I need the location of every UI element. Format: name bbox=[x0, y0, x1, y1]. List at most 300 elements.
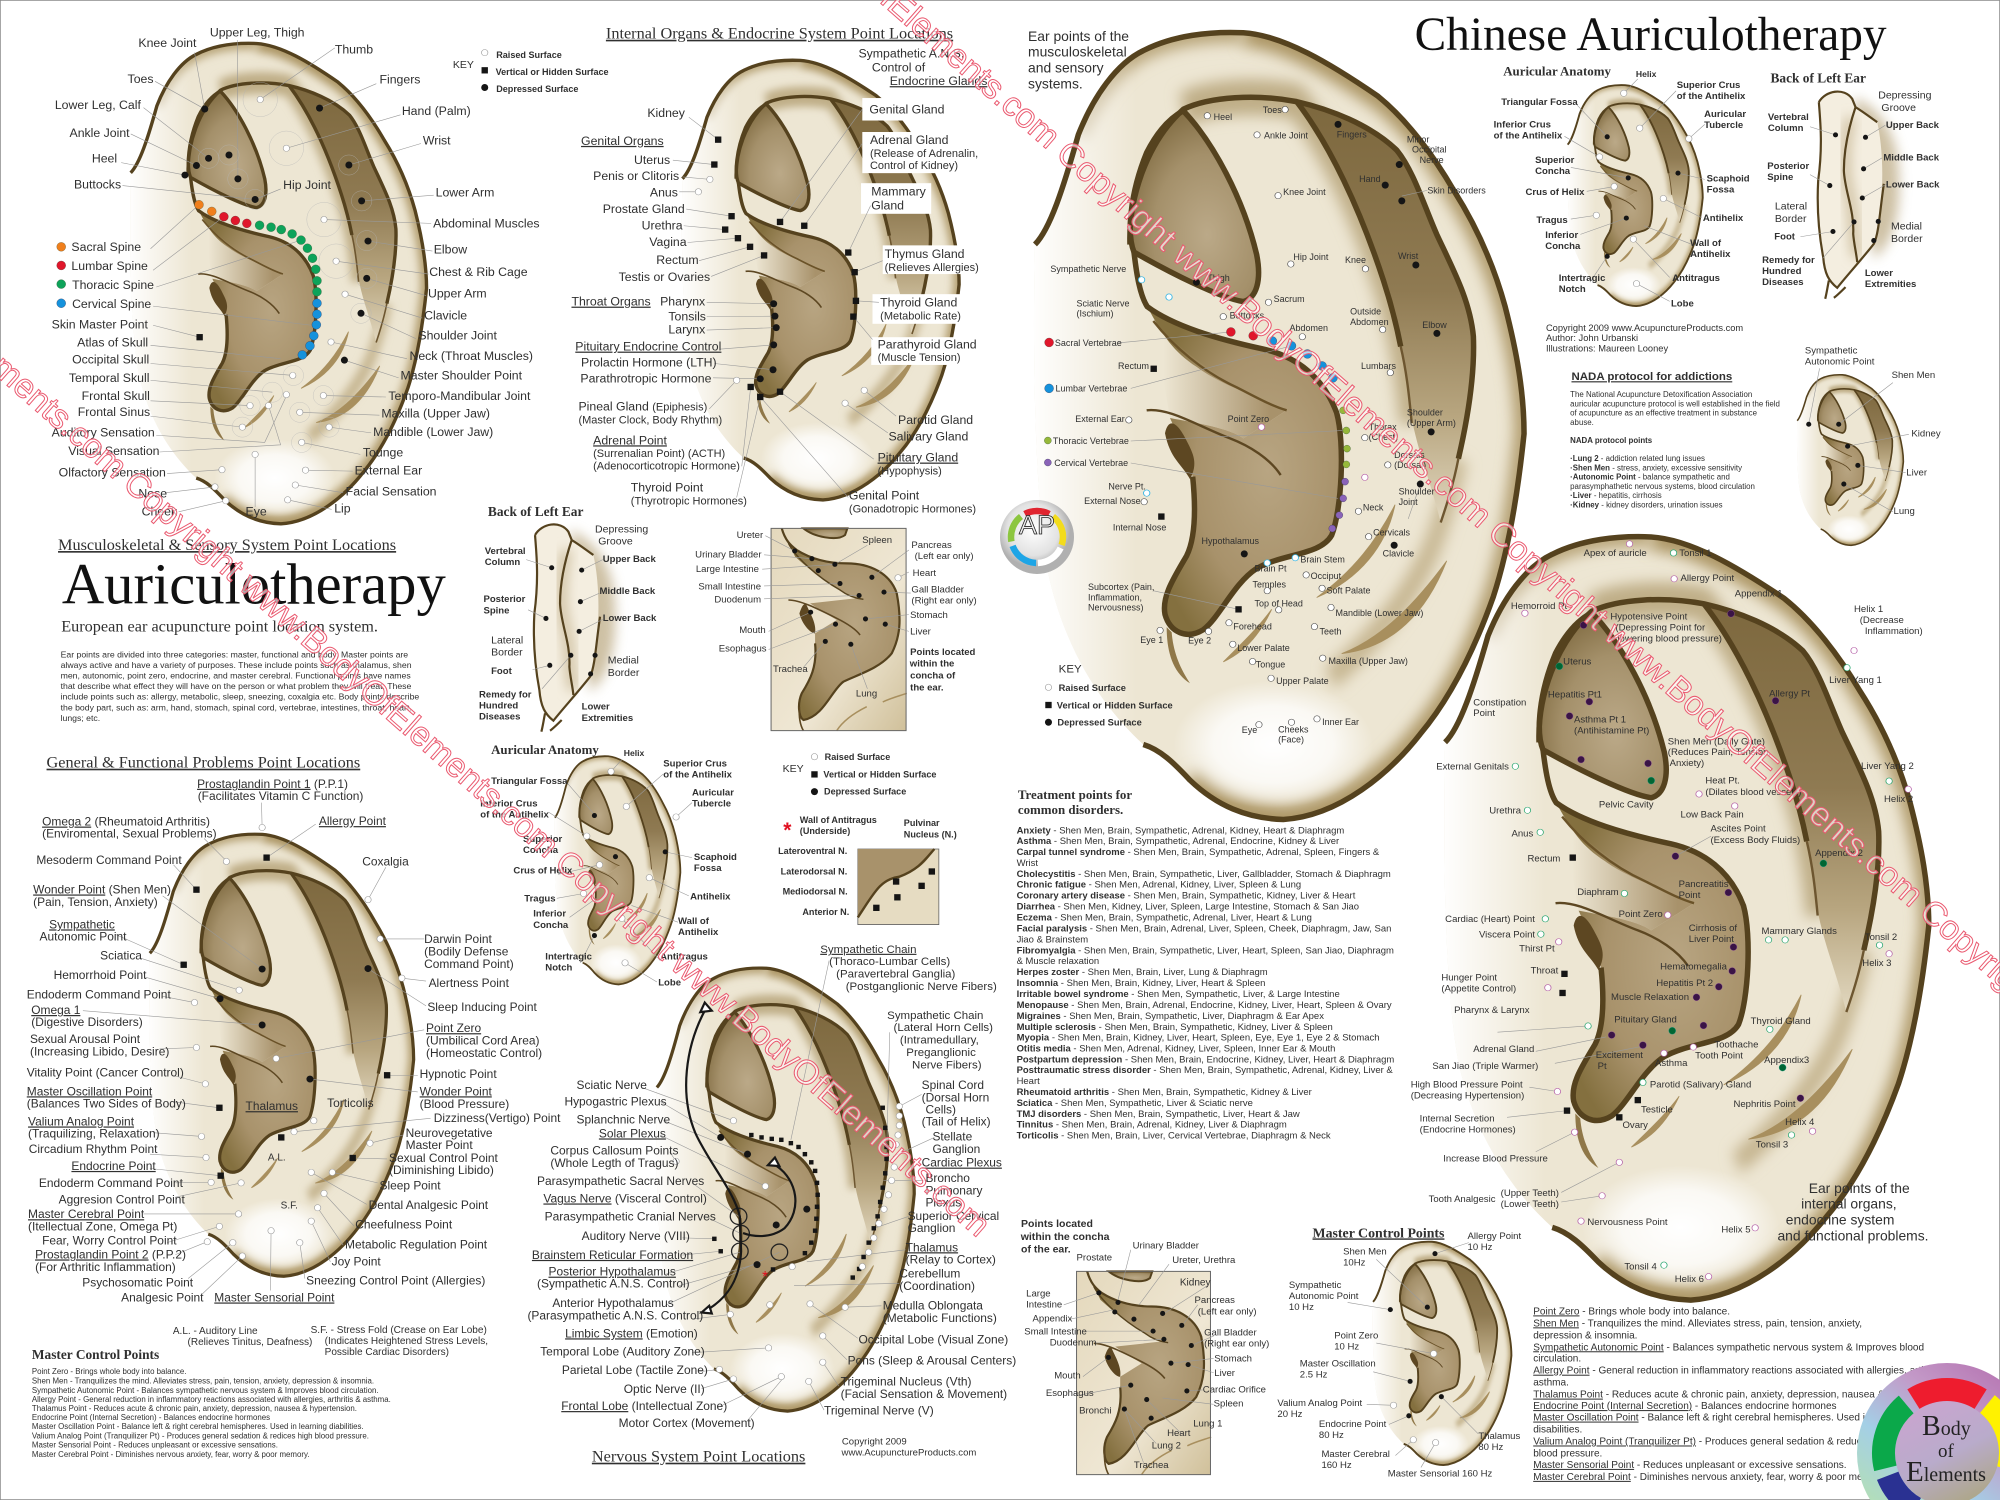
caption bbox=[1777, 1180, 1929, 1243]
labels: Endoderm Command Point bbox=[39, 1176, 184, 1190]
labels: Heart bbox=[913, 568, 936, 579]
labels: Sciatic Nerve bbox=[577, 1078, 647, 1092]
labels: (Increasing Libido, Desire) bbox=[30, 1045, 169, 1059]
labels: Clavicle bbox=[424, 309, 467, 323]
text block: master point descriptions: depression & insomnia. bbox=[1533, 1330, 1637, 1341]
notes: auditory line and stress fold: A.L. - Auditory Line bbox=[173, 1326, 258, 1337]
key and pulvinar inset bbox=[778, 752, 957, 925]
labels: Intertragic bbox=[1559, 273, 1606, 284]
labels: Buttocks bbox=[74, 177, 121, 191]
labels: Stomach bbox=[910, 610, 948, 621]
copyright credits: Author: John Urbanski bbox=[1546, 333, 1638, 343]
key: surface types: Vertical or Hidden Surface bbox=[823, 770, 936, 780]
labels: (Postganglionic Nerve Fibers) bbox=[846, 981, 997, 993]
labels: Thorax bbox=[1369, 422, 1397, 432]
panel: internal organs ear bbox=[571, 25, 987, 515]
lower labels: Point bbox=[1679, 890, 1701, 901]
labels: Ureter, Urethra bbox=[1172, 1255, 1236, 1266]
labels bbox=[1050, 105, 1486, 744]
pulvinar labels: Lateroventral N. bbox=[778, 846, 847, 856]
labels: Ankle Joint bbox=[1264, 131, 1309, 141]
labels: Wall of bbox=[1690, 238, 1722, 249]
upper raised and depressed points bbox=[1525, 544, 1854, 716]
labels: Superior Crus bbox=[1677, 80, 1740, 91]
small concentric rings bbox=[209, 155, 367, 442]
upper labels: Uterus bbox=[1563, 656, 1592, 667]
labels: Mesoderm Command Point bbox=[36, 853, 182, 867]
heading: Back of Left Ear bbox=[1770, 70, 1866, 85]
labels: Spine bbox=[483, 606, 509, 617]
labels: Sleep Inducing Point bbox=[427, 1000, 538, 1014]
labels: Border bbox=[1775, 213, 1807, 225]
labels: Tonsils bbox=[668, 309, 706, 323]
lower labels: Cirrhosis of bbox=[1689, 923, 1737, 934]
labels: Middle Back bbox=[1883, 153, 1940, 164]
lower labels: (Decreasing Hypertension) bbox=[1411, 1091, 1524, 1102]
text block: master control points: Master Cerebral Point - Diminishes nervous anxiety, fear, worry & poor memory. bbox=[32, 1450, 310, 1459]
disorder list: Irritable bowel syndrome - Shen Men, Sympathetic, Liver, & Large Intestine bbox=[1017, 989, 1340, 1000]
lower labels: Liver Point bbox=[1689, 934, 1734, 945]
subtitle: European ear acupuncture point location system. bbox=[61, 617, 378, 635]
lower labels: (Appetite Control) bbox=[1441, 984, 1516, 995]
disorder list: Chronic fatigue - Shen Men, Adrenal, Kidney, Liver, Spleen & Lung bbox=[1017, 880, 1301, 891]
labels: (Umbilical Cord Area) bbox=[426, 1034, 540, 1048]
labels: Psychosomatic Point bbox=[82, 1276, 194, 1290]
labels: Notch bbox=[1559, 284, 1586, 295]
labels: Visual Sensation bbox=[68, 444, 160, 458]
panel: concha inset, chinese bbox=[1020, 1218, 1269, 1475]
text block: master point descriptions: asthma. bbox=[1533, 1378, 1569, 1389]
labels: Cervicals bbox=[1373, 528, 1411, 538]
labels: Wonder Point (Shen Men) bbox=[33, 882, 171, 896]
labels: Thyroid Gland bbox=[880, 296, 957, 310]
points bbox=[1809, 424, 1858, 484]
labels: Scaphoid bbox=[694, 852, 737, 863]
lower labels: Testicle bbox=[1641, 1105, 1673, 1116]
ear illustration bbox=[554, 753, 682, 989]
labels: Inner Ear bbox=[1322, 717, 1359, 727]
notes: auditory line and stress fold: Possible Cardiac Disorders) bbox=[325, 1347, 449, 1358]
caption: systems. bbox=[1028, 75, 1083, 91]
disorder list: Posttraumatic stress disorder - Shen Men, Brain, Sympathetic, Adrenal, Kidney, Liver & bbox=[1017, 1065, 1393, 1076]
labels: Corpus Callosum Points bbox=[550, 1144, 679, 1158]
labels: within the bbox=[909, 659, 954, 670]
labels: Sympathetic Nerve bbox=[1050, 264, 1126, 274]
labels: Toes bbox=[1263, 105, 1282, 115]
ear illustration bbox=[680, 53, 963, 509]
circled nuclei bbox=[730, 1208, 788, 1260]
caption: Ear points of the bbox=[1028, 28, 1129, 44]
text block: NADA protocol: ·Liver - hepatitis, cirrhosis bbox=[1570, 491, 1662, 500]
heading: internal organs: Internal Organs & Endocrine System Point Locations bbox=[606, 25, 953, 43]
notes: auditory line and stress fold bbox=[173, 1325, 488, 1358]
labels: concha of bbox=[910, 671, 956, 682]
lower labels: Anxiety) bbox=[1670, 758, 1704, 769]
labels: Cheefulness Point bbox=[355, 1217, 453, 1231]
labels: Sympathetic A.N.S. bbox=[858, 46, 964, 60]
labels: Toes bbox=[128, 72, 154, 86]
labels: Control of bbox=[872, 60, 926, 74]
text block: master point descriptions: Sympathetic Autonomic Point - Balances sympathetic nervous system & Improves blood bbox=[1533, 1342, 1924, 1353]
disorder list: Wrist bbox=[1017, 858, 1038, 869]
text block: master control points: Valium Analog Point (Tranquilizer Pt) - Produces general sedation & redices high blood pressure. bbox=[32, 1431, 369, 1440]
caption: and functional problems. bbox=[1777, 1227, 1929, 1243]
upper labels: (Depressing Point for bbox=[1615, 622, 1706, 633]
labels: Motor Cortex (Movement) bbox=[619, 1416, 755, 1430]
labels: (Enviromental, Sexual Problems) bbox=[42, 827, 217, 841]
pulvinar labels: Nucleus (N.) bbox=[904, 830, 957, 840]
labels: Endocrine Glands bbox=[890, 74, 987, 88]
text block: master control points: Allergy Point - General reduction in inflammatory reactions associated with allergies, arthritis & asthma. bbox=[32, 1395, 391, 1404]
ear illustration bbox=[1030, 20, 1530, 836]
raised green points bbox=[1515, 766, 1889, 1265]
labels bbox=[1494, 69, 1750, 310]
labels: Cardiac Plexus bbox=[922, 1156, 1002, 1170]
lower labels: Pancreatitis bbox=[1679, 879, 1729, 890]
white label boxes bbox=[861, 98, 985, 365]
text block: master point descriptions: blood pressure. bbox=[1533, 1448, 1602, 1459]
labels: Border bbox=[1891, 233, 1923, 245]
labels: Vitality Point (Cancer Control) bbox=[27, 1066, 184, 1080]
key: surface types bbox=[783, 752, 936, 796]
labels: Remedy for bbox=[479, 689, 532, 700]
labels: Trachea bbox=[1134, 1460, 1169, 1471]
labels: 80 Hz bbox=[1478, 1442, 1504, 1453]
labels bbox=[480, 748, 737, 988]
panel: musculoskeletal and sensory ear bbox=[52, 25, 540, 534]
labels: Tubercle bbox=[1704, 120, 1743, 131]
labels: Column bbox=[1768, 123, 1804, 134]
labels: Fear, Worry Control Point bbox=[42, 1234, 177, 1248]
labels: Tounge bbox=[363, 445, 403, 459]
logo: Body of Elements: of bbox=[1938, 1441, 1954, 1462]
panel: concha inset, european bbox=[695, 528, 977, 731]
text block: master point descriptions: Allergy Point - General reduction in inflammatory reactions associated with allergies, arthritis & bbox=[1533, 1366, 1952, 1377]
labels: of the Antihelix bbox=[1494, 131, 1563, 142]
labels: Notch bbox=[545, 962, 573, 973]
leader lines bbox=[83, 803, 431, 1295]
key: surface types: Vertical or Hidden Surface bbox=[496, 67, 609, 77]
labels: (For Arthritic Inflammation) bbox=[35, 1260, 176, 1274]
labels: Shen Men bbox=[1343, 1247, 1387, 1258]
labels: Anterior Hypothalamus bbox=[552, 1296, 674, 1310]
labels: Duodenum bbox=[1050, 1337, 1097, 1348]
labels: Brainstem Reticular Formation bbox=[532, 1248, 693, 1262]
labels: Thymus Gland bbox=[885, 247, 965, 261]
text block: master point descriptions: Point Zero - Brings whole body into balance. bbox=[1533, 1306, 1730, 1317]
leader lines bbox=[549, 760, 692, 982]
labels: Inferior bbox=[533, 908, 566, 919]
lower labels: Liver Yang 2 bbox=[1861, 761, 1914, 772]
labels: Sympathetic bbox=[1805, 345, 1858, 356]
text block: NADA protocol bbox=[1570, 371, 1780, 509]
lower labels: Helix 4 bbox=[1785, 1117, 1815, 1128]
labels: S.F. bbox=[281, 1201, 298, 1212]
text block: NADA protocol: ·Autonomic Point - balance sympathetic and bbox=[1570, 473, 1730, 482]
labels: Duodenum bbox=[714, 595, 761, 606]
disorder list bbox=[1017, 826, 1394, 1141]
labels: Intertragic bbox=[545, 951, 593, 962]
labels: Dorsals bbox=[1394, 450, 1425, 460]
labels: Lower Back bbox=[1886, 179, 1940, 190]
key: surface types: Raised Surface bbox=[825, 752, 890, 762]
intro paragraph: the body part, such as: arm, hand, stomach, spinal cord, vertebrae, intestines, throat, heart, bbox=[61, 702, 412, 712]
labels: Sacral Vertebrae bbox=[1055, 338, 1122, 348]
labels: Top of Head bbox=[1254, 598, 1303, 608]
labels: Brain Pt bbox=[1254, 564, 1287, 574]
labels: Heel bbox=[1214, 112, 1232, 122]
labels: Sciatica bbox=[100, 948, 142, 962]
depressed points bbox=[760, 304, 776, 379]
labels: (Release of Adrenalin, bbox=[870, 148, 978, 160]
labels: Helix bbox=[1636, 69, 1657, 79]
labels: Gland bbox=[871, 198, 904, 212]
lower labels: Nervousness Point bbox=[1587, 1217, 1668, 1228]
labels: Auditory Nerve (VIII) bbox=[582, 1229, 690, 1243]
upper labels: Hepatitis Pt1 bbox=[1548, 689, 1602, 700]
labels: Trigeminal Nucleus (Vth) bbox=[841, 1375, 972, 1389]
labels: Upper Palate bbox=[1276, 676, 1329, 686]
labels: Fingers bbox=[379, 73, 420, 87]
labels: Tubercle bbox=[692, 798, 731, 809]
labels: Spinal Cord bbox=[922, 1078, 984, 1092]
labels: Small Intestine bbox=[1024, 1326, 1087, 1337]
lower labels: Diaphram bbox=[1577, 887, 1619, 898]
labels: Concha bbox=[533, 920, 569, 931]
labels: Limbic System (Emotion) bbox=[565, 1326, 698, 1340]
labels: Column bbox=[485, 557, 520, 568]
labels: Metabolic Regulation Point bbox=[345, 1237, 488, 1251]
intro paragraph: include points such as: allergy, metabolic, sleep, sneezing, coxalgia etc. Body points describe bbox=[61, 692, 419, 702]
disorder list: Herpes zoster - Shen Men, Brain, Liver, Lung & Diaphragm bbox=[1017, 967, 1268, 978]
labels: Master Cerebral Point bbox=[28, 1207, 145, 1221]
labels: Broncho bbox=[925, 1171, 970, 1185]
labels bbox=[695, 530, 977, 699]
labels: Pharynx bbox=[660, 295, 706, 309]
title: Auriculotherapy: Auriculotherapy bbox=[62, 552, 446, 617]
text block: master point descriptions: Master Sensorial Point - Reduces unpleasant or excessive sensations. bbox=[1533, 1460, 1847, 1471]
labels: Parietal Lobe (Tactile Zone) bbox=[562, 1363, 708, 1377]
back ear illustration bbox=[1818, 92, 1899, 299]
labels: Preganglionic bbox=[906, 1047, 976, 1059]
depressed purple points bbox=[1581, 760, 1800, 1098]
labels: Temples bbox=[1253, 579, 1287, 589]
text block: NADA protocol: ·Shen Men - stress, anxiety, excessive sensitivity bbox=[1570, 464, 1742, 473]
labels: Crus of Helix bbox=[513, 865, 573, 876]
labels: Elbow bbox=[1422, 320, 1447, 330]
sympathetic chain squares bbox=[714, 1108, 887, 1278]
pulvinar labels: Pulvinar bbox=[904, 818, 940, 828]
labels: Vagus Nerve (Visceral Control) bbox=[543, 1191, 707, 1205]
labels: (Balances Two Sides of Body) bbox=[27, 1096, 186, 1110]
labels: Internal Nose bbox=[1113, 522, 1166, 532]
leader lines bbox=[641, 960, 934, 1422]
lower labels: Helix 3 bbox=[1862, 958, 1891, 969]
labels: Spleen bbox=[1214, 1399, 1243, 1410]
raised points bbox=[195, 827, 402, 1256]
labels: Kidney bbox=[647, 106, 686, 120]
disorder list: Fibromyalgia - Shen Men, Brain, Sympathetic, Liver, Heart, Spleen, San Jiao, Diaphragm bbox=[1017, 945, 1394, 956]
labels: Vertebral bbox=[485, 546, 526, 557]
labels: (Coordination) bbox=[899, 1279, 975, 1293]
raised points bbox=[1129, 110, 1390, 725]
labels: (Gonadotropic Hormones) bbox=[849, 503, 976, 515]
labels: Torticolis bbox=[327, 1096, 374, 1110]
labels: 2.5 Hz bbox=[1300, 1370, 1328, 1381]
points bbox=[1607, 137, 1678, 256]
labels: Extremities bbox=[1865, 279, 1916, 290]
depressed points bbox=[185, 108, 368, 360]
labels: Occipital bbox=[1412, 145, 1446, 155]
labels: Pancreas bbox=[1195, 1295, 1235, 1306]
labels: Auditory Sensation bbox=[52, 426, 155, 440]
labels: Prostaglandin Point 2 (P.P.2) bbox=[35, 1247, 186, 1261]
labels: (Homeostatic Control) bbox=[426, 1046, 542, 1060]
upper labels: Inflammation) bbox=[1865, 626, 1923, 637]
labels: Groove bbox=[1881, 102, 1916, 114]
key: surface types: Depressed Surface bbox=[496, 84, 578, 94]
labels: Fossa bbox=[694, 863, 722, 874]
labels: Abdomen bbox=[1290, 323, 1328, 333]
labels: Lung bbox=[856, 688, 877, 699]
text block: master control points: Point Zero - Brings whole body into balance. bbox=[32, 1367, 186, 1376]
labels: Medulla Oblongata bbox=[883, 1299, 983, 1313]
labels: Thoracic Spine bbox=[72, 278, 154, 292]
lower labels: Thirst Pt bbox=[1519, 943, 1555, 954]
leader lines bbox=[1800, 125, 1887, 258]
labels: Inferior Crus bbox=[480, 798, 538, 809]
lower labels: Ovary bbox=[1622, 1120, 1648, 1131]
disorder list: Insomnia - Shen Men, Brain, Kidney, Liver, Heart & Spleen bbox=[1017, 978, 1265, 989]
labels: Lip bbox=[334, 502, 351, 516]
heading: within the concha bbox=[1020, 1231, 1110, 1243]
labels: Spine bbox=[1767, 172, 1793, 183]
vertebrae points bbox=[1048, 332, 1347, 529]
labels: Throat Organs bbox=[571, 295, 651, 309]
intro paragraph: that describe what effect they will have on the person or what problem they will treat. These bbox=[61, 681, 412, 691]
lower labels: Throat bbox=[1531, 965, 1559, 976]
labels: Hypogastric Plexus bbox=[564, 1094, 667, 1108]
lower labels: Asthma bbox=[1655, 1058, 1688, 1069]
labels: Master Cerebral bbox=[1321, 1449, 1390, 1460]
labels: 20 Hz bbox=[1277, 1409, 1303, 1420]
lower labels: Muscle Relaxation bbox=[1611, 992, 1689, 1003]
labels: Genital Organs bbox=[581, 134, 664, 148]
labels: Concha bbox=[1545, 241, 1581, 252]
panel: auricular anatomy, top bbox=[1494, 64, 1750, 311]
heading: Auricular Anatomy bbox=[1503, 64, 1611, 79]
disorder list: Eczema - Shen Men, Brain, Sympathetic, Adrenal, Liver, Heart & Lung bbox=[1017, 912, 1312, 923]
intro paragraph: always active and have a variety of purposes. These include points such as thalamus, shen bbox=[61, 660, 412, 670]
intro paragraph: men, autonomic, point zero, endocrine, and master cerebral. Functional points have names bbox=[61, 671, 411, 681]
labels: Sneezing Control Point (Allergies) bbox=[306, 1273, 485, 1287]
lower labels: Adrenal Gland bbox=[1473, 1044, 1534, 1055]
labels: (Thyrotropic Hormones) bbox=[631, 496, 747, 508]
text block: NADA protocol: NADA protocol points bbox=[1570, 436, 1653, 445]
labels: Scaphoid bbox=[1707, 174, 1750, 185]
labels: External Nose bbox=[1084, 496, 1141, 506]
lower labels: Rectum bbox=[1527, 853, 1560, 864]
labels: Prostaglandin Point 1 (P.P.1) bbox=[197, 777, 348, 791]
disorder list: Otitis media - Shen Men, Adrenal, Kidney, Liver, Spleen, Inner Ear & Mouth bbox=[1017, 1043, 1335, 1054]
key: surface types: KEY bbox=[1059, 663, 1082, 675]
labels: Analgesic Point bbox=[121, 1290, 204, 1304]
labels: Prostate bbox=[1077, 1252, 1112, 1263]
labels: Teeth bbox=[1320, 627, 1342, 637]
leader lines bbox=[121, 40, 434, 512]
labels: Autonomic Point bbox=[40, 929, 127, 943]
labels: Superior Crus bbox=[663, 759, 727, 770]
labels: Antihelix bbox=[678, 927, 719, 938]
disorder list: Multiple sclerosis - Shen Men, Brain, Sympathetic, Kidney, Liver & Spleen bbox=[1017, 1022, 1333, 1033]
labels: Pituitary Gland bbox=[878, 451, 958, 465]
labels: External Ear bbox=[355, 463, 422, 477]
labels: Posterior bbox=[1767, 161, 1809, 172]
key: surface types: KEY bbox=[453, 59, 474, 71]
disorder list: Facial paralysis - Shen Men, Brain, Adrenal, Liver, Spleen, Cheek, Diaphragm, Jaw, San bbox=[1017, 923, 1391, 934]
key: surface types: Vertical or Hidden Surface bbox=[1057, 700, 1173, 710]
lower labels: Pt bbox=[1598, 1061, 1607, 1072]
labels: Eye 2 bbox=[1188, 635, 1211, 645]
lower labels: Low Back Pain bbox=[1681, 809, 1744, 820]
lower labels: Cardiac (Heart) Point bbox=[1445, 914, 1535, 925]
labels: Concha bbox=[1535, 166, 1571, 177]
labels: (Lateral Horn Cells) bbox=[894, 1022, 993, 1034]
pulvinar labels: Mediodorsal N. bbox=[783, 886, 848, 896]
labels: Lumbar Vertebrae bbox=[1055, 384, 1127, 394]
labels: Ureter bbox=[737, 530, 764, 541]
labels: Tragus bbox=[1536, 215, 1568, 226]
heading: Back of Left Ear bbox=[488, 504, 583, 519]
labels: Heart bbox=[1167, 1428, 1191, 1439]
labels: Wrist bbox=[423, 133, 451, 147]
text block: master point descriptions: circulation. bbox=[1533, 1354, 1581, 1365]
labels: Lobe bbox=[1671, 299, 1694, 310]
vertical points bbox=[714, 140, 856, 397]
labels: Master Sensorial Point bbox=[214, 1290, 335, 1304]
labels: Groove bbox=[598, 535, 633, 547]
labels: Stomach bbox=[1214, 1354, 1252, 1365]
labels bbox=[1024, 1240, 1269, 1471]
upper labels: Appendix 1 bbox=[1735, 588, 1783, 599]
key: surface types: Depressed Surface bbox=[1057, 718, 1142, 728]
labels: Border bbox=[491, 647, 523, 659]
labels: Lung 1 bbox=[1193, 1418, 1222, 1429]
labels: of the Antihelix bbox=[663, 770, 733, 781]
lower labels: Helix 5 bbox=[1721, 1225, 1751, 1236]
labels: Nose bbox=[138, 486, 167, 500]
labels: Small Intestine bbox=[698, 581, 761, 592]
notes: auditory line and stress fold: (Relieves Tinitus, Deafness) bbox=[188, 1337, 312, 1348]
labels: (Right ear only) bbox=[911, 596, 977, 607]
labels: Occiput bbox=[1311, 571, 1342, 581]
labels: Nervousness) bbox=[1088, 602, 1143, 612]
upper labels: (Decrease bbox=[1860, 615, 1904, 626]
labels bbox=[27, 777, 561, 1304]
heading bbox=[1020, 1218, 1110, 1256]
labels: Sympathetic Chain bbox=[887, 1010, 983, 1022]
labels: Wrist bbox=[1398, 251, 1419, 261]
labels: Salivary Gland bbox=[888, 430, 968, 444]
labels: Brain Stem bbox=[1300, 554, 1345, 564]
pink points bbox=[1261, 427, 1365, 477]
labels bbox=[52, 25, 540, 519]
text block: NADA protocol: abuse. bbox=[1570, 418, 1594, 427]
heading bbox=[1018, 787, 1132, 817]
disorder list: Anxiety - Shen Men, Brain, Sympathetic, Adrenal, Kidney, Heart & Diaphragm bbox=[1017, 826, 1344, 837]
labels: Sympathetic bbox=[1289, 1280, 1342, 1291]
labels: Frontal Skull bbox=[82, 389, 150, 403]
